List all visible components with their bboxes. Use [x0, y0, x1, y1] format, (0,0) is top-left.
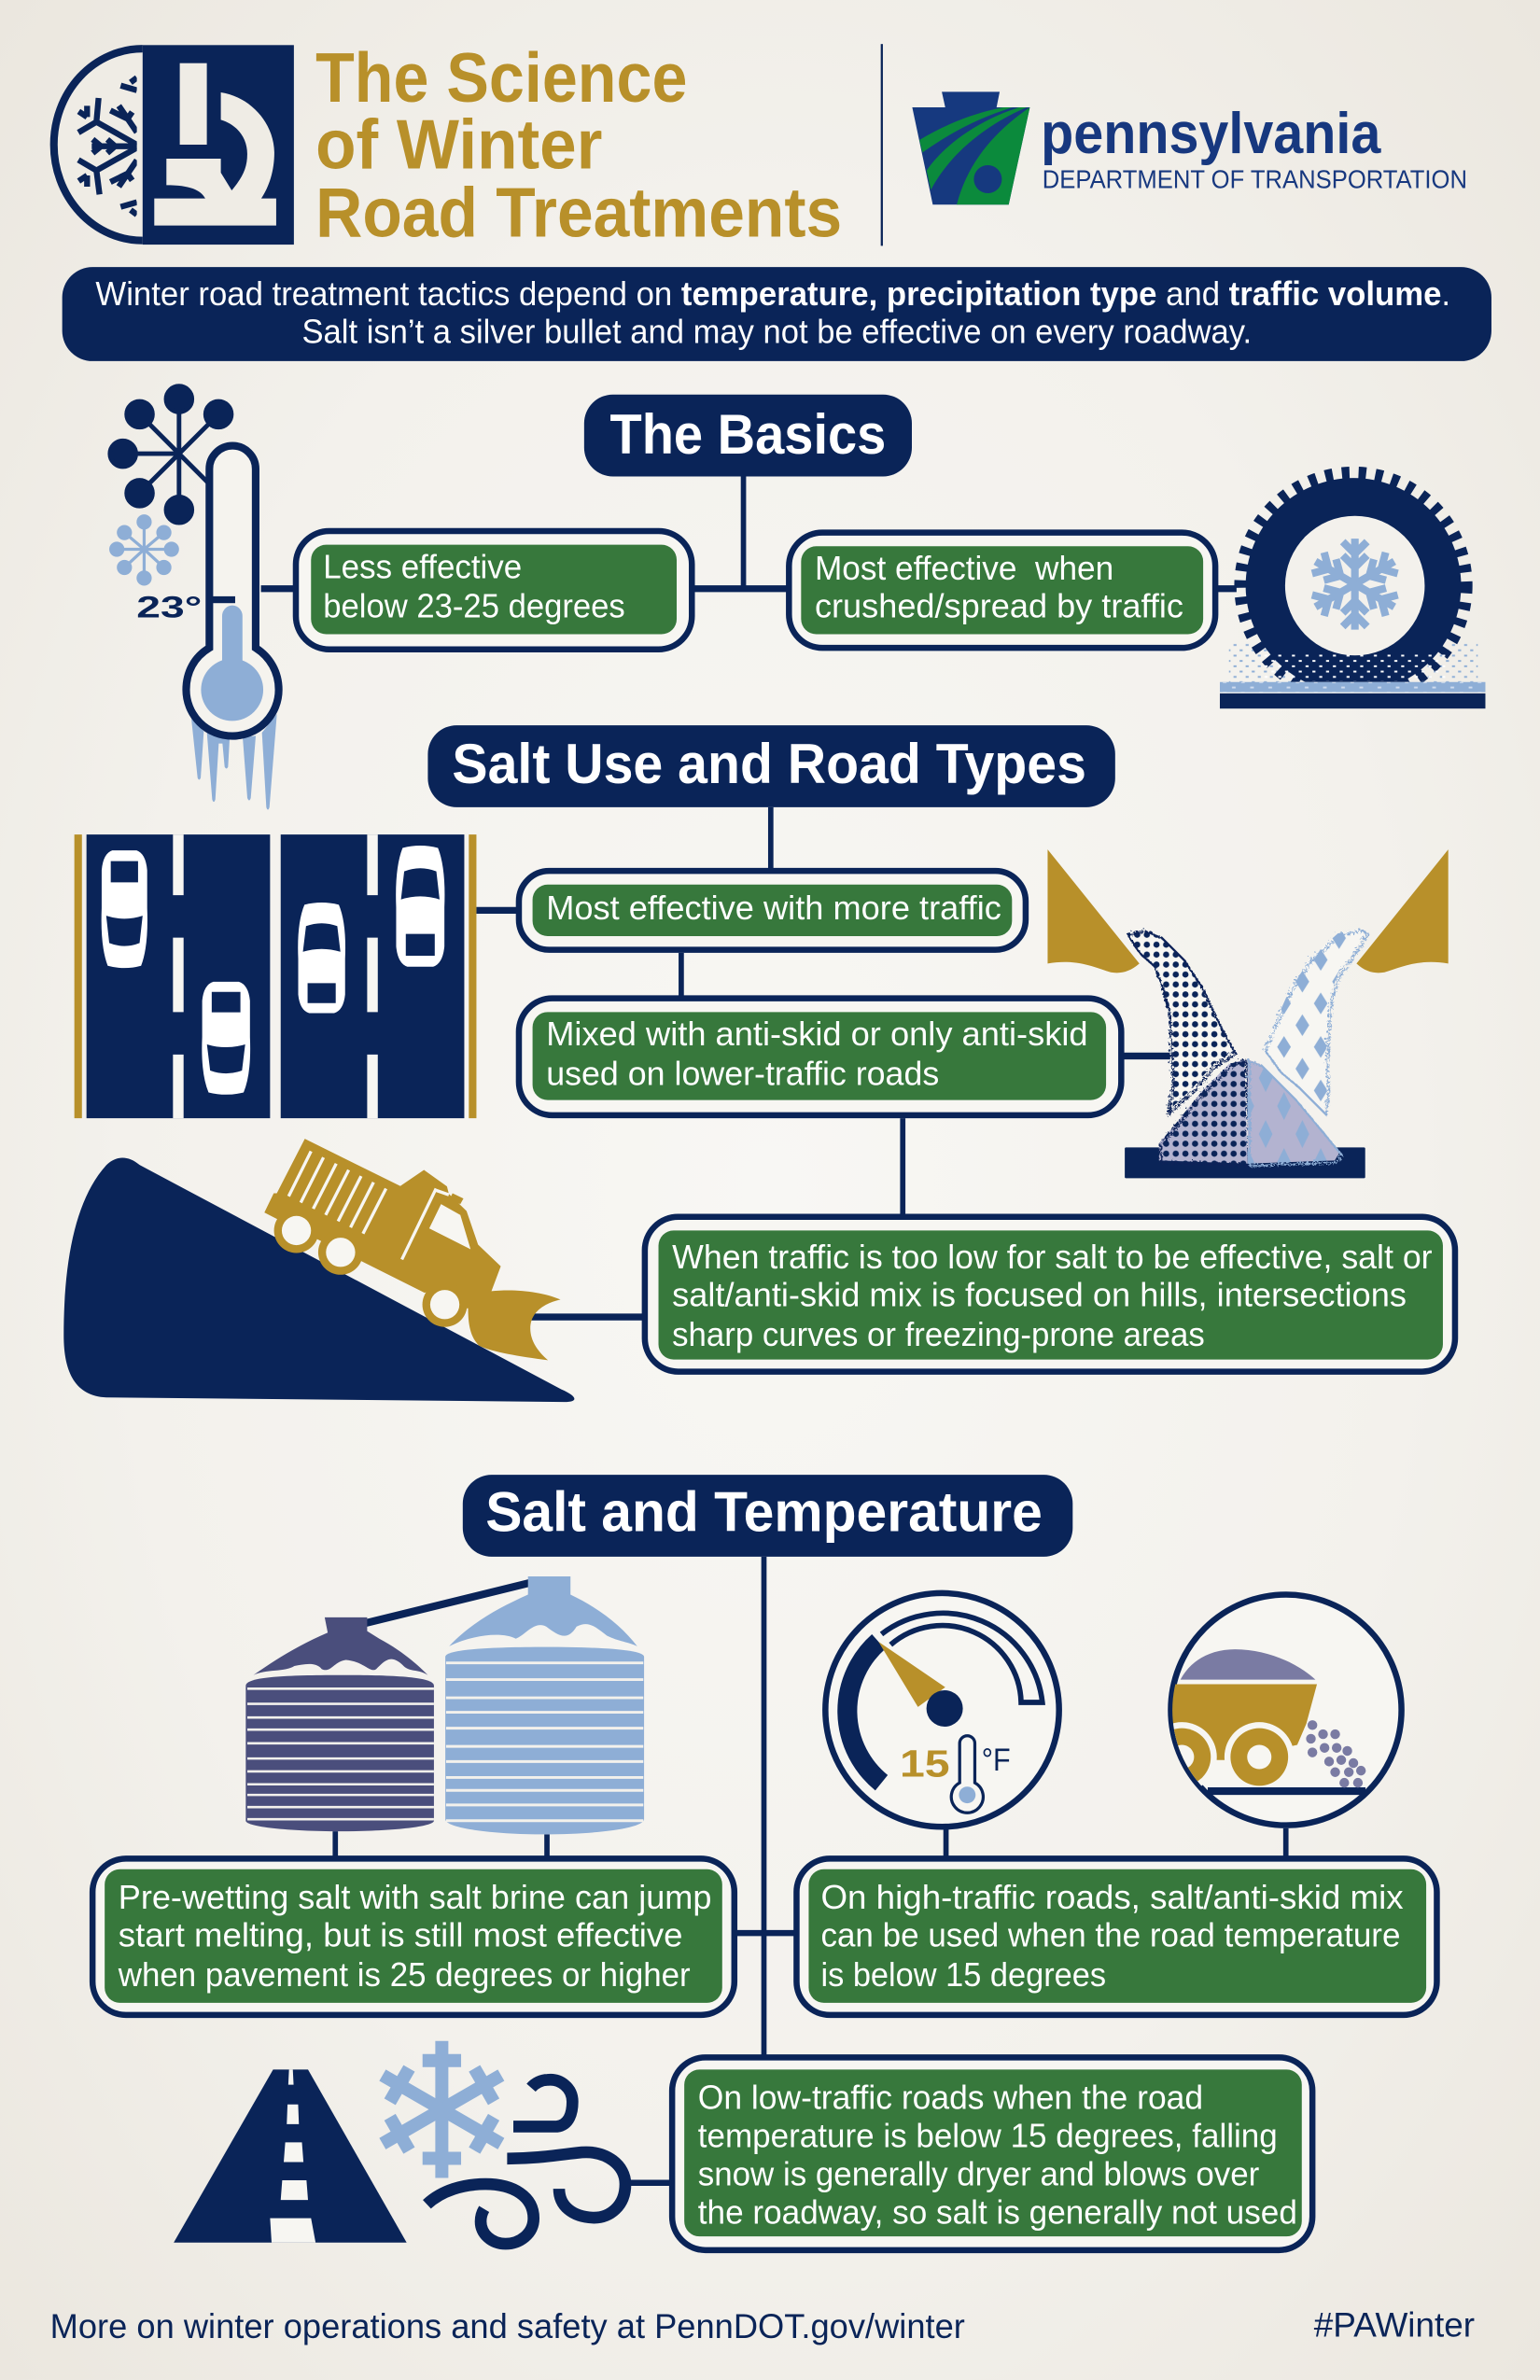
title [315, 38, 842, 252]
callout: mixed with anti-skid [519, 999, 1121, 1115]
icon: four-lane road with cars [75, 834, 476, 1118]
icon: thermometer with icicles [136, 446, 279, 809]
PennDOT wordmark: DEPARTMENT OF TRANSPORTATION [1043, 165, 1467, 194]
callout: low-traffic roads: snow is generally dryer and blows over [698, 2156, 1259, 2193]
callout: less effective [296, 531, 692, 650]
callout: high-traffic roads: is below 15 degrees [820, 1956, 1106, 1994]
PennDOT wordmark: pennsylvania [1041, 102, 1381, 166]
callout: high-traffic roads: On high-traffic roads, salt/anti-skid mix [820, 1879, 1404, 1916]
callout: low-traffic roads [672, 2057, 1312, 2250]
callout: low-traffic roads: On low-traffic roads when the road [698, 2079, 1203, 2117]
section: The Basics [110, 386, 1485, 809]
icon: road perspective [174, 2069, 407, 2243]
heading: Salt and Temperature: Salt and Temperature [485, 1480, 1043, 1543]
callout: pre-wetting salt [92, 1858, 735, 2015]
icon: plow truck on hill [264, 1139, 561, 1360]
callout: most effective with more traffic [519, 871, 1026, 950]
callout: most effective: crushed/spread by traffic [815, 588, 1183, 625]
callout: low traffic focus areas [645, 1217, 1455, 1372]
icon: thermometer with icicles: 23° [136, 591, 202, 624]
callout: high-traffic roads: can be used when the road temperature [820, 1917, 1400, 1954]
footer hashtag: #PAWinter [1314, 2304, 1475, 2344]
callout: low-traffic roads: the roadway, so salt is generally not used [698, 2193, 1297, 2231]
callout: low-traffic roads: temperature is below 15 degrees, falling [698, 2117, 1278, 2154]
icon: spreader truck [1147, 1595, 1402, 1826]
intro banner [63, 267, 1491, 361]
icon: large snowflake [110, 386, 231, 523]
callout: less effective: Less effective [323, 548, 522, 585]
callout: pre-wetting salt: when pavement is 25 degrees or higher [118, 1956, 691, 1994]
icon: salt and anti-skid spreaders [1047, 849, 1449, 1178]
callout: mixed with anti-skid: used on lower-traffic roads [546, 1055, 939, 1092]
icon: hill [63, 1158, 574, 1402]
heading: Salt Use and Road Types: Salt Use and Road Types [452, 733, 1086, 795]
title: Road Treatments [315, 174, 842, 252]
icon: blowing snowflake [373, 2041, 511, 2177]
callout: most effective with more traffic: Most effective with more traffic [546, 889, 1001, 927]
icon: small snowflake [111, 516, 177, 584]
icon: temperature gauge 15 F: °F [982, 1743, 1011, 1778]
heading: The Basics: The Basics [609, 403, 886, 466]
icon: brine silos [245, 1576, 644, 1834]
section: Salt Use and Road Types [63, 725, 1455, 1402]
icon: tire on road [1220, 473, 1485, 708]
callout: pre-wetting salt: Pre-wetting salt with salt brine can jump [119, 1879, 711, 1916]
icon: temperature gauge 15 F: 15 [900, 1743, 950, 1785]
callout: most effective: Most effective when [815, 550, 1113, 587]
callout: low traffic focus areas: When traffic is too low for salt to be effective, salt or [672, 1239, 1433, 1276]
callout: low traffic focus areas: sharp curves or freezing-prone areas [672, 1316, 1205, 1353]
title: of Winter [315, 105, 602, 183]
footer link text: More on winter operations and safety at PennDOT.gov/winter [50, 2306, 965, 2345]
intro banner: Salt isn’t a silver bullet and may not be effective on every roadway. [301, 313, 1252, 350]
PennDOT wordmark [1041, 102, 1467, 194]
intro banner: Winter road treatment tactics depend on temperature, precipitation type and traffic volume. [95, 275, 1450, 313]
header logo: snowflake and microscope [54, 45, 294, 245]
callout: high-traffic roads [796, 1858, 1436, 2015]
callout: most effective [789, 533, 1215, 648]
icon: wind swirls [427, 2079, 625, 2244]
section: Salt and Temperature [92, 1475, 1436, 2250]
callout: mixed with anti-skid: Mixed with anti-skid or only anti-skid [546, 1015, 1088, 1053]
callout: low traffic focus areas: salt/anti-skid mix is focused on hills, intersections [672, 1277, 1407, 1314]
PennDOT keystone logo [912, 91, 1029, 204]
heading: The Basics [584, 395, 912, 476]
icon: temperature gauge 15 F [825, 1593, 1059, 1827]
title: The Science [315, 38, 687, 117]
callout: pre-wetting salt: start melting, but is still most effective [119, 1917, 683, 1954]
callout: less effective: below 23-25 degrees [323, 588, 625, 625]
